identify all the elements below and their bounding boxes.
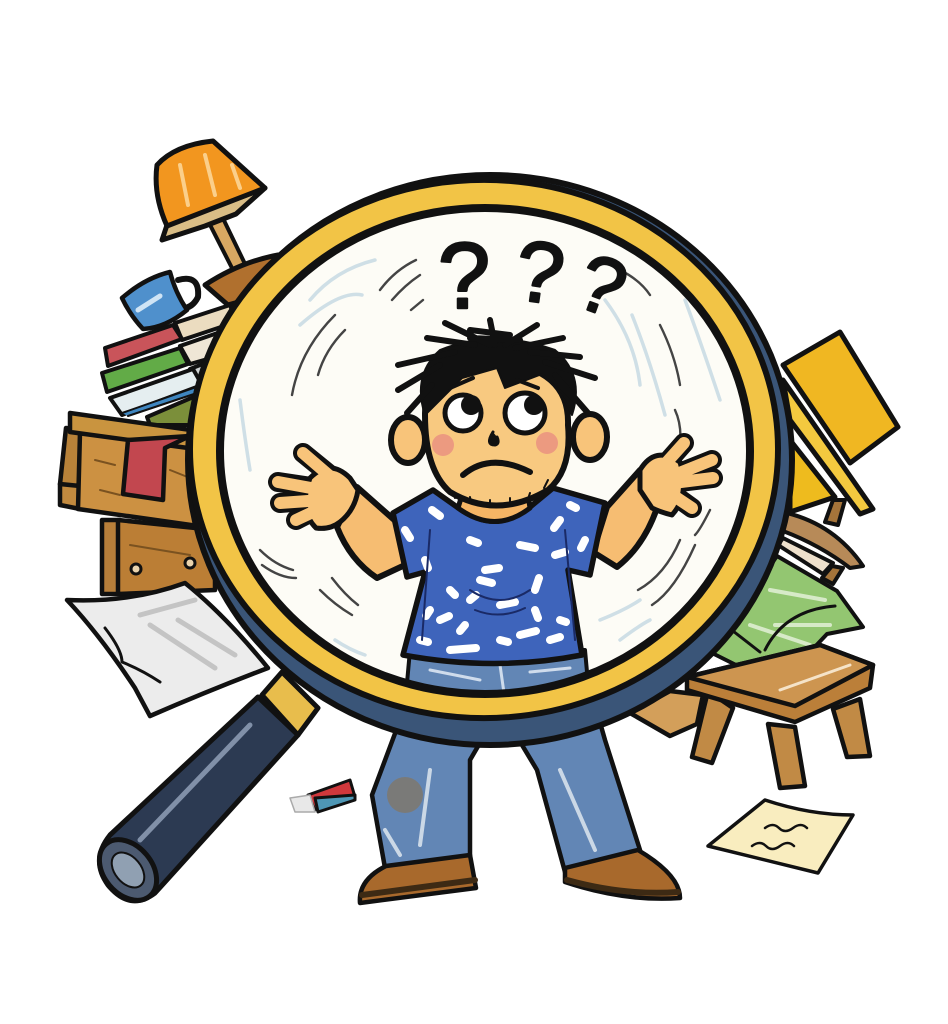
shirt — [393, 488, 605, 664]
left arm — [337, 487, 405, 578]
green pillow — [710, 556, 863, 677]
right arm — [593, 470, 658, 567]
question marks: ? — [509, 222, 570, 324]
lamp — [156, 141, 278, 305]
stacked books — [102, 305, 236, 425]
jeans waist — [405, 650, 590, 705]
eyes — [445, 393, 545, 433]
eraser — [290, 780, 355, 812]
head — [425, 362, 569, 506]
magnifying glass handle — [88, 672, 318, 911]
question marks — [438, 222, 638, 335]
chair slats — [778, 500, 863, 584]
white pillow — [67, 583, 268, 716]
question marks: ? — [438, 223, 490, 328]
blue mug — [122, 272, 198, 329]
paper note — [708, 800, 853, 873]
lens glass — [220, 208, 750, 694]
neck — [458, 495, 530, 522]
yellow chair back — [783, 332, 898, 514]
man — [278, 320, 713, 705]
ears — [391, 414, 607, 463]
wooden stool — [630, 645, 873, 788]
left shoe — [360, 855, 476, 903]
magnifying glass rim — [188, 175, 792, 745]
right hand — [640, 443, 713, 515]
hair — [398, 320, 595, 415]
right leg — [495, 670, 640, 872]
eyebrows, nose and mouth — [450, 378, 538, 475]
lens scratch marks — [240, 260, 720, 655]
left hand — [278, 453, 358, 528]
left leg — [372, 680, 505, 868]
question marks: ? — [566, 236, 638, 335]
right shoe — [565, 850, 680, 899]
wooden desk with drawers — [60, 413, 215, 594]
